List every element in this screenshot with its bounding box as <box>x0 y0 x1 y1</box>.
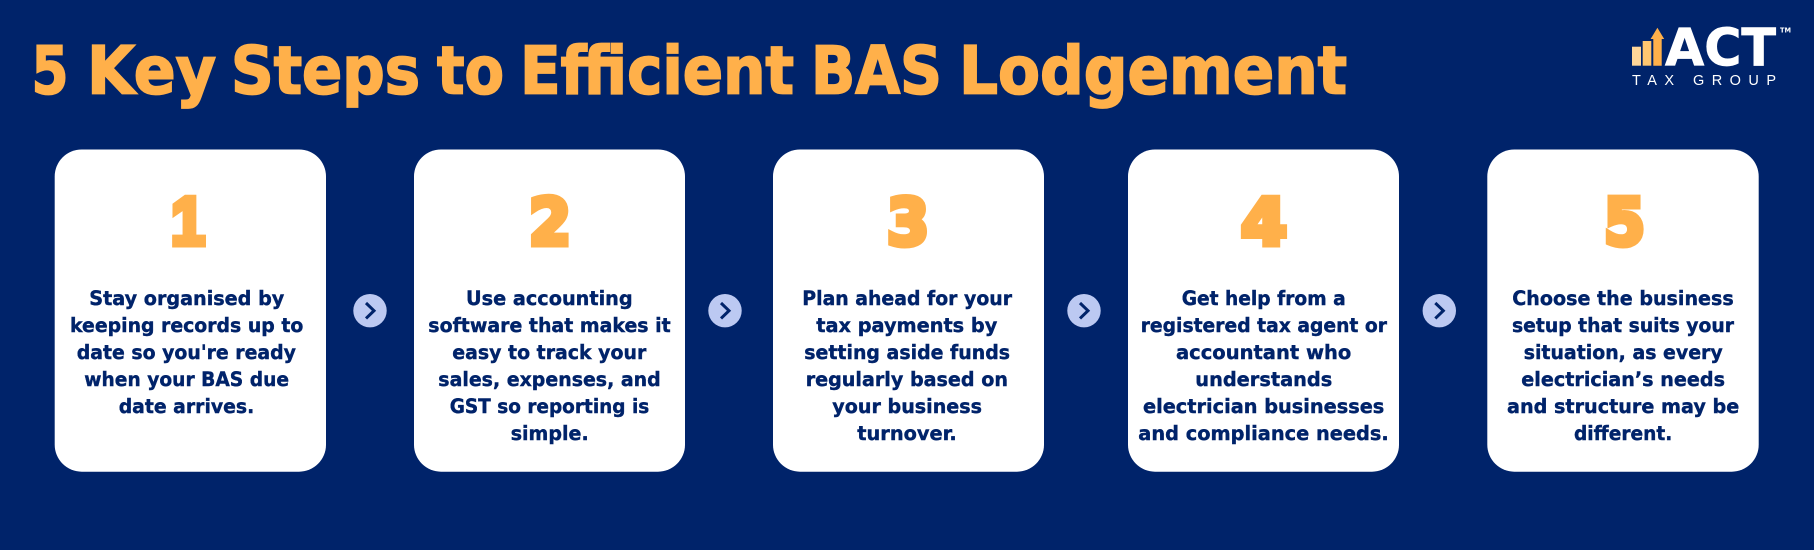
panel: step 5 <box>1487 150 1759 472</box>
icon: rising bars with arrow <box>1632 28 1664 66</box>
step 4 text: understands <box>1195 368 1332 391</box>
step 5 text <box>1507 287 1739 445</box>
logo: ACT Tax Group <box>1632 19 1791 89</box>
step 1 text: keeping records up to <box>70 314 303 337</box>
title: to <box>437 32 504 110</box>
step 2 text: Use accounting <box>466 287 633 310</box>
panel: step 3 <box>773 150 1044 472</box>
panel: step 1 <box>55 150 326 472</box>
arrow: step 1 to 2 <box>353 294 387 327</box>
step 2 text: GST so reporting is <box>450 395 649 418</box>
step number 2: 2 <box>529 186 571 260</box>
panel: step 2 <box>414 150 685 472</box>
step number 1: 1 <box>171 184 205 260</box>
step 1 text: when your BAS due <box>84 368 289 391</box>
step 4 text: Get help from a <box>1182 287 1346 310</box>
step 1 text: date arrives. <box>119 395 254 418</box>
step 5 text: Choose the business <box>1512 287 1734 310</box>
step 4 text: accountant who <box>1176 341 1351 364</box>
arrow: step 2 to 3 <box>708 294 742 327</box>
step 3 text: turnover. <box>857 422 957 445</box>
step number 4: 4 <box>1241 186 1287 260</box>
step number 5: 5 <box>1604 186 1645 260</box>
title: Lodgement <box>959 32 1347 110</box>
step 3 text: Plan ahead for your <box>802 287 1012 310</box>
title: Steps <box>231 32 420 110</box>
step number 3: 3 <box>887 186 929 260</box>
step 3 text: your business <box>832 395 982 418</box>
step 2 text: easy to track your <box>452 341 647 364</box>
logo: ACT Tax Group: TAX GROUP <box>1632 73 1776 89</box>
step 5 text: setup that suits your <box>1512 314 1734 337</box>
arrow: step 4 to 5 <box>1423 294 1456 327</box>
step 2 text: software that makes it <box>428 314 671 337</box>
step 3 text: tax payments by <box>816 314 998 337</box>
step 1 text <box>70 287 303 418</box>
title: BAS <box>811 32 942 110</box>
step 5 text: electrician’s needs <box>1521 368 1725 391</box>
step 1 text: date so you're ready <box>77 341 296 364</box>
step 2 text: simple. <box>511 422 589 445</box>
arrow: step 3 to 4 <box>1067 294 1101 327</box>
title: 5 <box>32 32 68 110</box>
title: Key <box>87 32 216 110</box>
logo: ACT Tax Group: TM <box>1780 26 1791 34</box>
title <box>32 32 1347 110</box>
step 2 text: sales, expenses, and <box>438 368 661 391</box>
step 5 text: different. <box>1574 422 1672 445</box>
title: Efficient <box>520 32 794 110</box>
step 3 text: regularly based on <box>806 368 1008 391</box>
step 4 text: and compliance needs. <box>1138 422 1389 445</box>
step 3 text: setting aside funds <box>804 341 1010 364</box>
step 2 text <box>428 287 671 445</box>
step 3 text <box>802 287 1012 445</box>
step 1 text: Stay organised by <box>89 287 285 310</box>
step 4 text: electrician businesses <box>1143 395 1384 418</box>
step 4 text <box>1138 287 1389 445</box>
step 4 text: registered tax agent or <box>1141 314 1387 337</box>
panel: step 4 <box>1128 150 1399 472</box>
logo: ACT Tax Group: ACT <box>1665 19 1777 79</box>
step 5 text: situation, as every <box>1524 341 1723 364</box>
step 5 text: and structure may be <box>1507 395 1739 418</box>
